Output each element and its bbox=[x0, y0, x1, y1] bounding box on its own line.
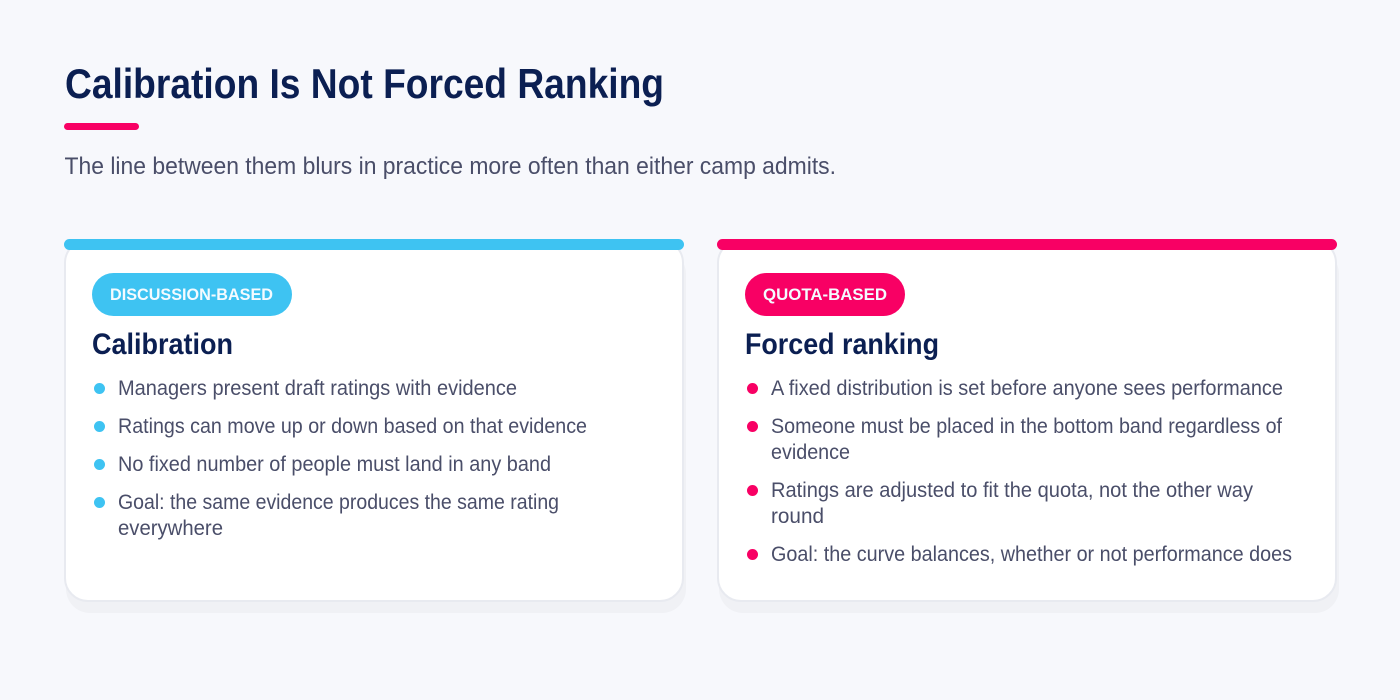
list item 3: round bbox=[771, 505, 824, 528]
list item 4: everywhere bbox=[118, 517, 223, 540]
card body bbox=[65, 240, 683, 601]
list item 3: Ratings are adjusted to fit the quota, not the other way bbox=[771, 479, 1253, 502]
list item 2: evidence bbox=[771, 441, 850, 464]
list item 4: Goal: the curve balances, whether or not performance does bbox=[771, 543, 1292, 566]
badge: quota-based bbox=[745, 273, 905, 316]
list item 2 bbox=[747, 415, 1282, 464]
card top bar bbox=[64, 239, 684, 250]
card body bbox=[718, 240, 1336, 601]
card shadow bbox=[719, 250, 1339, 613]
badge: quota-based: QUOTA-BASED bbox=[763, 285, 887, 304]
list item 3: No fixed number of people must land in any band bbox=[118, 453, 551, 476]
list item 4 bbox=[94, 491, 559, 540]
panel: forced ranking bbox=[717, 239, 1339, 613]
list item 1: A fixed distribution is set before anyone sees performance bbox=[771, 377, 1283, 400]
title accent bar bbox=[64, 123, 139, 130]
list item 3 bbox=[747, 479, 1253, 528]
list item 4: Goal: the same evidence produces the same rating bbox=[118, 491, 559, 514]
subtitle: The line between them blurs in practice more often than either camp admits. bbox=[64, 153, 836, 180]
title: Calibration Is Not Forced Ranking bbox=[65, 60, 664, 107]
list item 1: Managers present draft ratings with evidence bbox=[118, 377, 517, 400]
list item 2: Someone must be placed in the bottom band regardless of bbox=[771, 415, 1282, 438]
heading: Forced ranking bbox=[745, 328, 939, 361]
card shadow bbox=[66, 250, 686, 613]
badge: discussion-based bbox=[92, 273, 292, 316]
badge: discussion-based: DISCUSSION-BASED bbox=[110, 285, 273, 304]
panel: calibration bbox=[64, 239, 686, 613]
list item 2: Ratings can move up or down based on that evidence bbox=[118, 415, 587, 438]
heading: Calibration bbox=[92, 328, 233, 361]
card top bar bbox=[717, 239, 1337, 250]
